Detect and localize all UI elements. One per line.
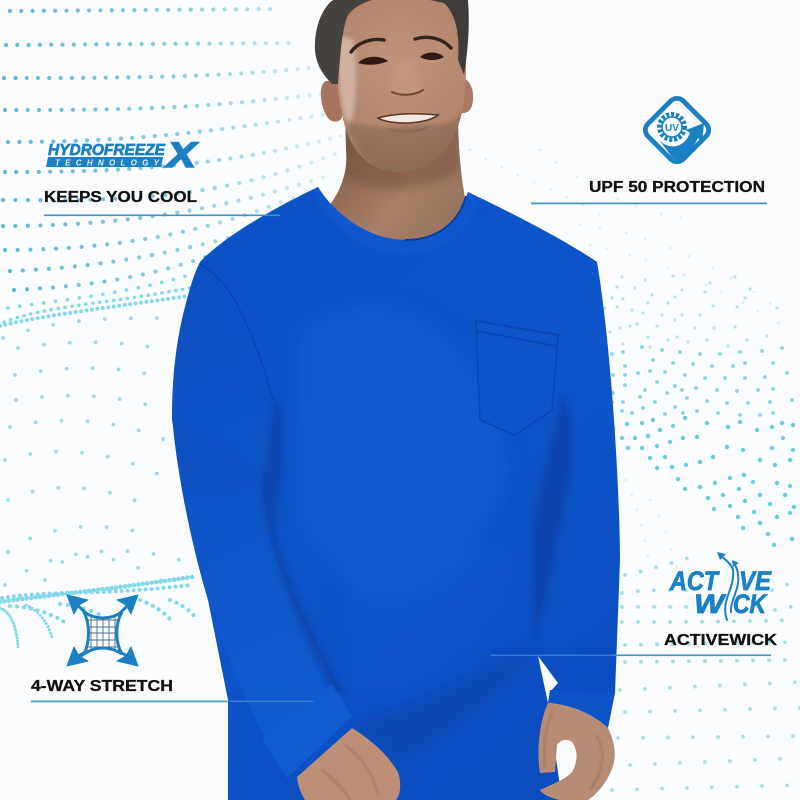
shirt body xyxy=(172,187,620,800)
eyes xyxy=(358,57,388,65)
icon: stretch arrows xyxy=(67,595,138,666)
left crease shadow xyxy=(262,395,345,695)
face highlight xyxy=(338,35,356,128)
feature: activewick xyxy=(490,552,777,656)
rule over shirt xyxy=(490,655,612,656)
eyebrows xyxy=(351,40,384,52)
lower highlight xyxy=(345,537,525,698)
left ear xyxy=(321,80,342,122)
dot pattern: bright wave lower-left xyxy=(0,577,194,647)
collar shadow line xyxy=(405,196,466,240)
left hand xyxy=(297,728,400,800)
logo ve: VE xyxy=(739,566,772,596)
dot pattern: bright wave upper-left xyxy=(0,275,195,326)
logo w: W xyxy=(694,589,727,619)
shirt shading xyxy=(172,306,572,765)
right hand shading xyxy=(544,712,602,790)
pocket xyxy=(476,321,558,435)
face xyxy=(335,0,466,172)
arrow shafts xyxy=(76,604,129,657)
neck xyxy=(330,110,470,250)
rule xyxy=(612,654,771,656)
swoosh arrow xyxy=(660,123,704,161)
left sleeve fold xyxy=(176,450,180,478)
rule xyxy=(531,202,767,204)
rule xyxy=(44,214,280,216)
hair xyxy=(315,0,372,84)
sleeve seam xyxy=(200,264,273,400)
right hand xyxy=(538,703,615,800)
feature: hydrofreeze xyxy=(44,136,280,216)
face shading xyxy=(338,35,466,177)
right crease shadow xyxy=(534,395,572,640)
logo bar text: TECHNOLOGY xyxy=(55,158,160,168)
icon: uv shield xyxy=(642,95,712,165)
mouth xyxy=(378,114,438,123)
logo arrow heads xyxy=(717,552,739,567)
rule over shirt xyxy=(227,701,313,702)
logo x: X xyxy=(165,136,199,175)
diamond xyxy=(642,95,712,165)
lower lip shadow xyxy=(388,127,428,131)
label: ACTIVEWICK xyxy=(664,632,777,649)
right ear xyxy=(458,78,473,113)
uv text: UV xyxy=(665,123,679,134)
logo: hydrofreeze x xyxy=(46,136,199,175)
label: UPF 50 PROTECTION xyxy=(589,179,765,196)
arrow heads xyxy=(67,595,138,666)
right cuff xyxy=(548,690,615,728)
left hand finger shading xyxy=(322,745,378,800)
sun rays xyxy=(660,114,684,140)
lower fold shadow xyxy=(362,651,524,759)
feature: upf 50 xyxy=(531,95,767,204)
logo swoosh arrows xyxy=(720,555,738,620)
dot pattern: right field xyxy=(605,276,794,545)
model: man in blue shirt xyxy=(172,0,620,800)
label: 4-WAY STRETCH xyxy=(31,678,173,695)
left cuff xyxy=(262,685,352,778)
collar xyxy=(312,187,480,254)
label: KEEPS YOU COOL xyxy=(44,189,197,206)
neck shadow xyxy=(340,120,462,189)
stubble xyxy=(345,113,462,172)
net xyxy=(84,612,122,654)
net grid xyxy=(86,615,120,651)
dot pattern: lower-right xyxy=(622,555,800,662)
nose xyxy=(390,62,422,95)
dot pattern: mid-left sparse arcs xyxy=(3,318,180,590)
hair right xyxy=(430,0,469,75)
logo bar xyxy=(46,157,163,167)
feature: 4-way stretch xyxy=(31,595,313,702)
chest highlight xyxy=(300,306,510,598)
logo word: HYDROFREEZE xyxy=(48,142,166,159)
sun xyxy=(662,117,682,137)
rule xyxy=(31,700,227,702)
left sleeve xyxy=(172,256,352,778)
dot pattern: top-left rows xyxy=(3,9,345,290)
logo: active wick xyxy=(669,552,772,620)
logo act: ACT xyxy=(669,566,720,596)
logo ck: CK xyxy=(733,589,768,619)
